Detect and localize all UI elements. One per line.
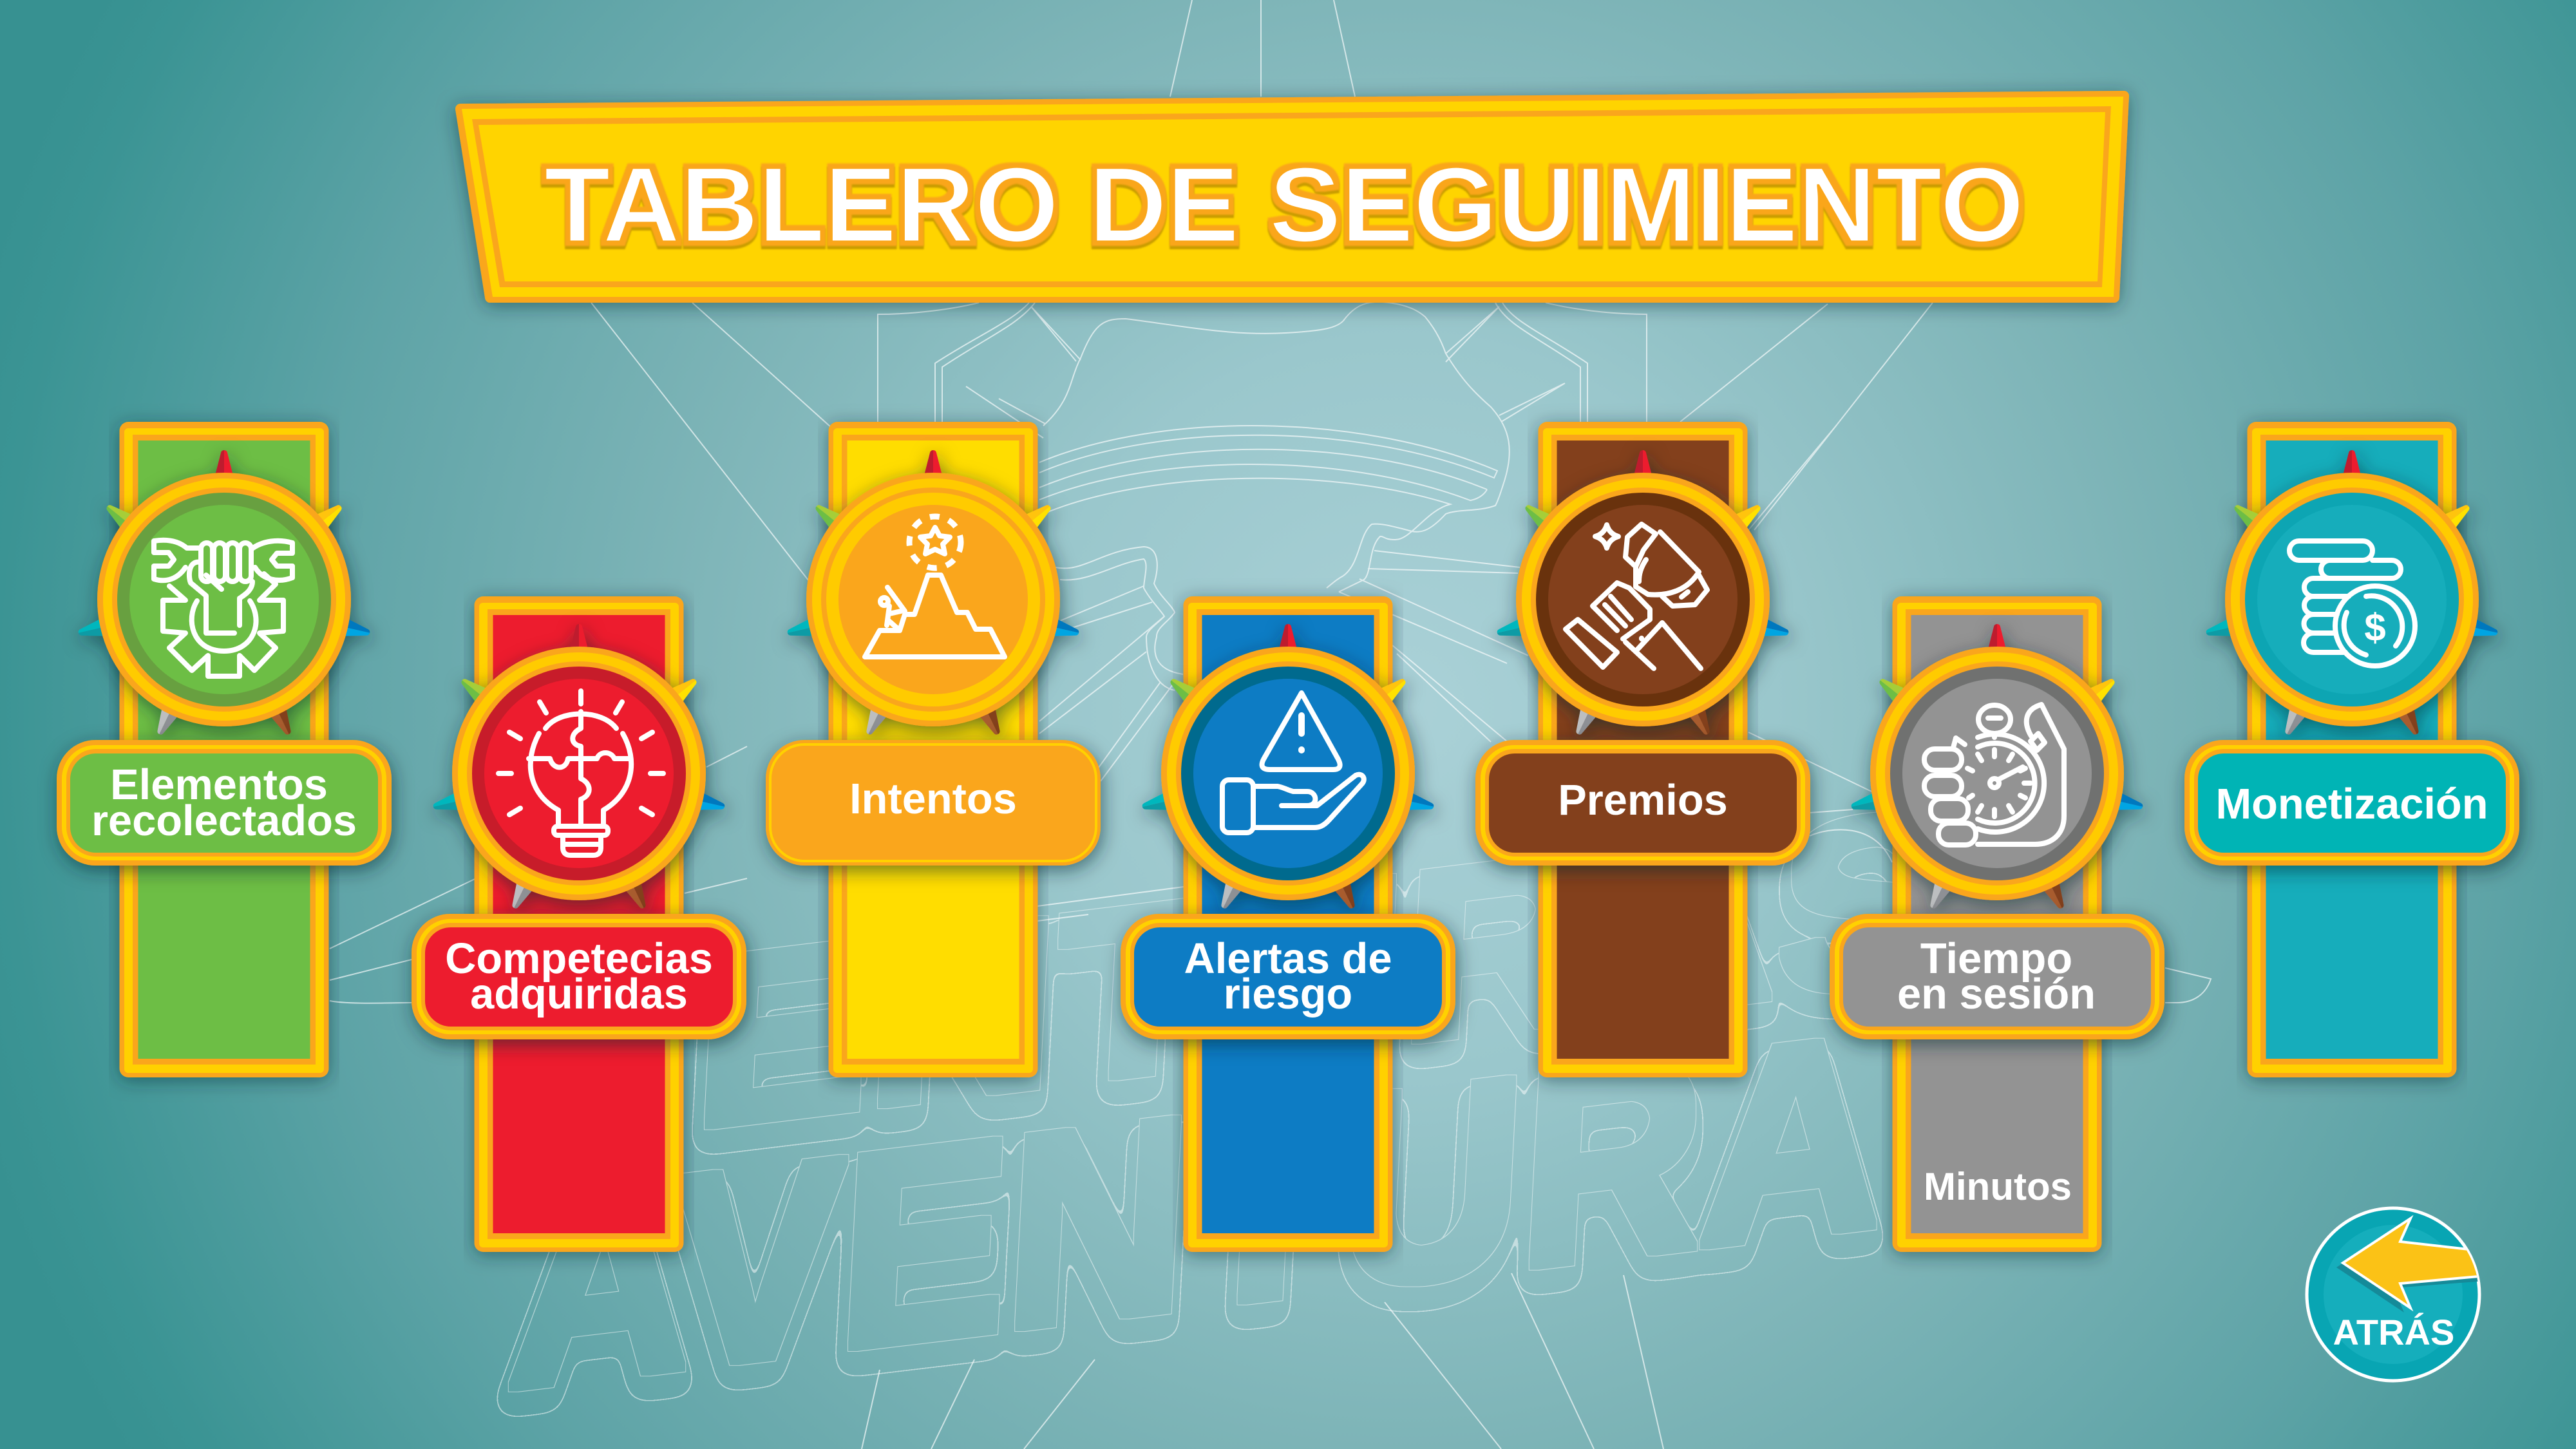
back button	[2307, 1208, 2486, 1381]
label	[1830, 914, 2164, 1039]
label text: Intentos	[849, 775, 1017, 823]
button text: ATRÁS	[2333, 1312, 2454, 1352]
column: Alertas de riesgo	[1121, 596, 1455, 1252]
column: Competecias adquiridas	[412, 596, 746, 1252]
column: Premios	[1475, 422, 1810, 1077]
column: Intentos	[766, 422, 1101, 1077]
strip	[474, 596, 684, 1252]
medallion	[1495, 450, 1791, 739]
dollar sign: $	[2364, 606, 2386, 649]
strip	[2248, 422, 2456, 1077]
unit text: Minutos	[1924, 1165, 2072, 1208]
label text: recolectados	[91, 797, 357, 845]
icon: hand raising trophy	[1566, 524, 1707, 668]
label	[412, 914, 746, 1039]
label	[766, 740, 1101, 866]
label	[1475, 740, 1810, 866]
icon: climber reaching star on a mountain	[865, 516, 1005, 657]
strip	[1184, 596, 1392, 1252]
medallion	[2204, 450, 2500, 739]
strip	[120, 422, 328, 1077]
background line art: shield logo	[330, 0, 2211, 1449]
label	[1121, 914, 1455, 1039]
label text: riesgo	[1224, 971, 1352, 1018]
column: Elementos recolectados	[57, 422, 392, 1077]
label text: Premios	[1558, 777, 1728, 824]
arrow	[2336, 1218, 2486, 1312]
label	[2184, 740, 2519, 866]
label text: Competecias	[445, 935, 713, 983]
strip	[1538, 422, 1748, 1077]
strip	[828, 422, 1038, 1077]
label text: Alertas de	[1184, 935, 1392, 983]
label text: en sesión	[1897, 971, 2096, 1018]
background wordmark upper row: ENTURAS	[689, 758, 1959, 1178]
medallion	[76, 450, 372, 739]
column: Tiempo en sesión	[1830, 596, 2164, 1252]
icon: coin stack with dollar coin	[2289, 541, 2415, 666]
label text: Elementos	[110, 761, 328, 809]
banner plate	[460, 96, 2124, 298]
background wordmark lower row: AVENTURA	[504, 974, 1891, 1446]
icon: hand holding stopwatch	[1924, 705, 2064, 845]
label text: adquiridas	[470, 971, 688, 1018]
label	[57, 740, 392, 866]
icon: hand holding warning triangle	[1222, 693, 1364, 833]
icon: fist with wrench and gear	[154, 540, 292, 676]
medallion	[431, 624, 727, 913]
label text: Monetización	[2215, 781, 2488, 828]
label text: Tiempo	[1920, 935, 2072, 983]
medallion	[1849, 624, 2145, 913]
column: Monetización	[2184, 422, 2519, 1077]
medallion	[785, 450, 1081, 739]
strip	[1892, 596, 2102, 1252]
title text: TABLERO DE SEGUIMIENTO	[544, 146, 2024, 265]
medallion	[1140, 624, 1436, 913]
icon: puzzle light bulb	[498, 691, 663, 855]
button disc	[2307, 1208, 2479, 1381]
title banner	[460, 96, 2124, 298]
